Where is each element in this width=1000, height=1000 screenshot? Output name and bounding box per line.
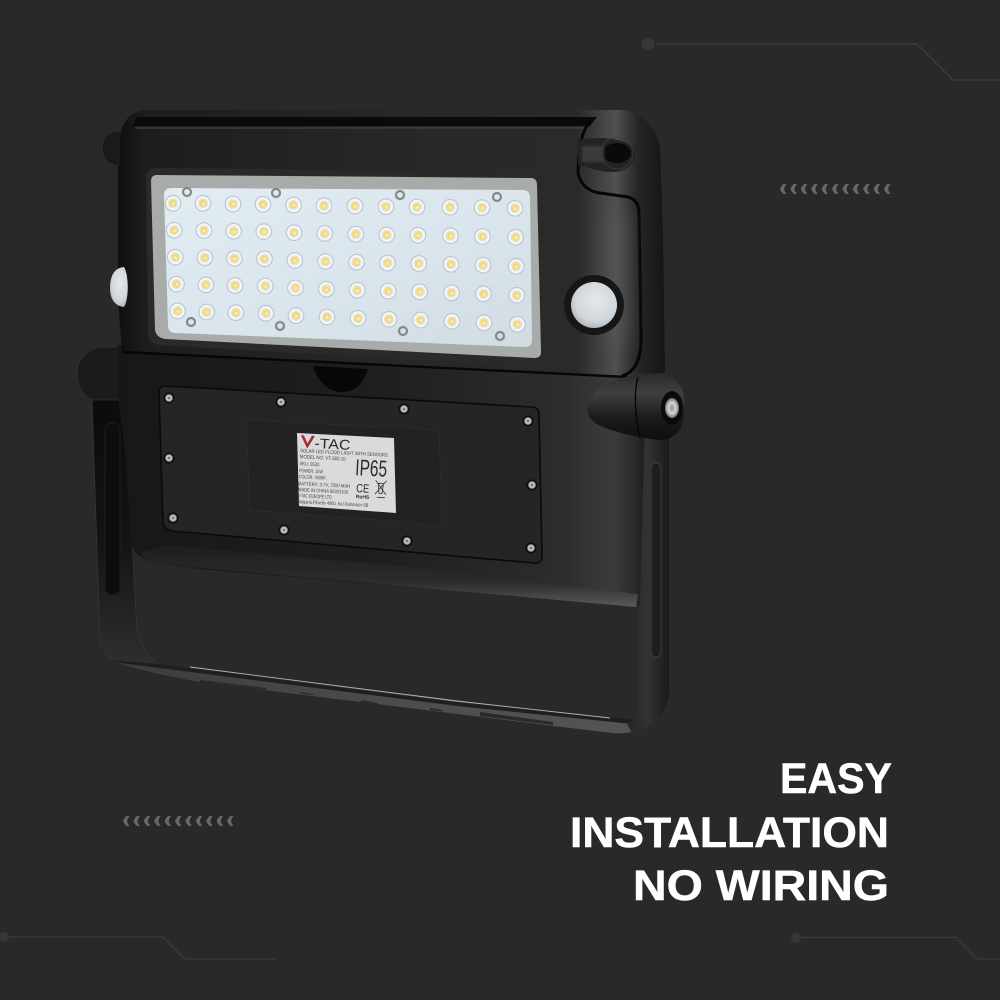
- label text: RoHS: [356, 494, 370, 501]
- product label sticker: [297, 433, 396, 513]
- right PIR sensor: [564, 275, 624, 335]
- rear battery cover plate: [159, 386, 542, 563]
- label text: IP65: [355, 454, 388, 482]
- bracket: top-edge highlight: [190, 667, 610, 718]
- bracket: right arm: [626, 400, 669, 733]
- mounting bracket: [92, 396, 669, 733]
- heading: easy installation no wiring: NO WIRING: [633, 862, 889, 910]
- side sheen: [604, 210, 632, 345]
- upper housing bottom groove: [122, 352, 627, 377]
- top rib highlight: [135, 127, 588, 129]
- LED lens frame: [146, 168, 550, 368]
- label text: BATTERY: 3.7V, 7200 MAH: [298, 481, 351, 490]
- chevron row: bottom left: [123, 816, 234, 826]
- upper lamp housing: [118, 110, 665, 378]
- label text: CE: [356, 481, 370, 496]
- left PIR sensor: [110, 267, 128, 307]
- circuit line: top right: [642, 38, 1000, 80]
- bracket: right slot: [651, 463, 661, 657]
- LED lens rim: [151, 175, 541, 358]
- label text: COLOR: 4000K: [299, 474, 326, 482]
- label text: [297, 434, 389, 510]
- top recess strip: [133, 117, 597, 126]
- heading: easy installation no wiring: INSTALLATION: [570, 809, 889, 857]
- label text: V-TAC EUROPE LTD: [298, 493, 332, 501]
- bracket: dark inner strip: [118, 659, 636, 724]
- right side groove: [578, 122, 641, 376]
- label text: Bulgaria,Plovdiv 4000, bu.l.Kairovkov 9B: [297, 499, 369, 509]
- bracket: bottom bar: [118, 660, 655, 733]
- brand logo: -TAC: [314, 435, 351, 453]
- cable notch: [313, 366, 368, 392]
- LED array: [165, 195, 526, 333]
- top-right hinge with bolt: [578, 137, 635, 172]
- label text: SKU: 8530: [299, 461, 320, 468]
- lower housing bottom highlight: [140, 545, 638, 607]
- bracket: left slot: [105, 423, 120, 595]
- bracket: left arm: [92, 396, 156, 663]
- label text: MADE IN CHINA 80303106: [298, 487, 348, 496]
- lower housing: [118, 345, 646, 607]
- label text: MODEL NO: VT-382-10: [300, 454, 346, 463]
- label text: SOLAR LED FLOOD LIGHT WITH SENSORS: [300, 448, 389, 459]
- LED board: [164, 188, 532, 347]
- label text: POWER: 15W: [299, 468, 323, 475]
- board screw rings: [183, 188, 504, 340]
- top hinge nub: [103, 132, 120, 165]
- plate screws: [163, 392, 538, 554]
- bracket: embossed marks: [200, 680, 553, 725]
- floodlight product: [77, 110, 685, 733]
- icon: crossed bin: [375, 480, 387, 498]
- circuit line: bottom left: [0, 932, 277, 959]
- right pivot knob: [587, 373, 685, 440]
- faint label recess: [246, 420, 442, 525]
- circuit line: bottom right: [791, 933, 1000, 959]
- left pivot knob: [77, 347, 122, 400]
- heading: easy installation no wiring: [570, 755, 892, 910]
- heading: easy installation no wiring: EASY: [780, 755, 892, 803]
- chevron row: top right: [780, 184, 890, 194]
